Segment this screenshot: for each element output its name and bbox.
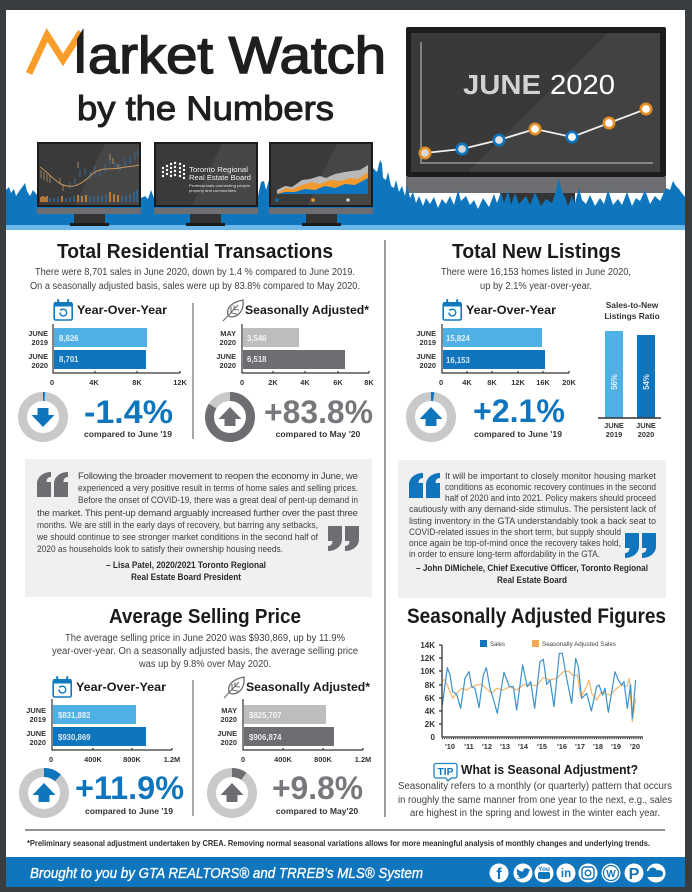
bar chart: seasonally adjusted: MAY [220,329,236,338]
legend: Seasonally Adjusted Sales [542,642,616,648]
bar chart: price seasonally adjusted: 1.2M [355,755,371,764]
quote text: in order to ensure long-term affordability in the GTA. [409,549,600,559]
logo M [29,28,84,74]
bar chart: new listings [416,324,576,387]
title line 2: by the Numbers [77,90,334,128]
bar chart: new listings: 15,824 [446,334,471,343]
panel: total residential transactions [22,241,374,439]
social icons [490,864,666,883]
title [29,27,386,85]
attribution: – John DiMichele, Chief Executive Officer, Toronto Regional [416,562,648,573]
icon: opening quote [409,473,440,498]
year-over-year title: Year-Over-Year [466,303,556,317]
bar chart: sales-to-new listings ratio: 2020 [638,430,654,439]
stat: +83.8%: +83.8% [264,394,373,430]
bar chart: price year-over-year: 0 [49,755,53,764]
icon: leaf [223,300,243,321]
footer credit: Brought to you by GTA REALTORS® and TRREB's MLS® System [30,865,423,882]
intro text: year-over-year. On a seasonally adjusted basis, the average selling price [52,646,358,657]
monitor: Toronto Regional Real Estate Board: Real Estate Board [189,175,251,182]
centre divider [384,240,386,817]
bar chart: seasonally adjusted [216,324,374,387]
icon: closing quote [625,533,656,558]
stat: +11.9%: compared to June '19 [85,806,173,816]
line chart: sales and seasonally adjusted sales: '17 [575,742,585,751]
bar chart: year-over-year: 2020 [32,361,48,370]
bar chart: new listings: 16K [536,378,550,387]
bar chart: seasonally adjusted: 0 [240,378,244,387]
icon: calendar [54,299,72,320]
icon: leaf [224,677,244,698]
intro text [30,267,360,292]
bar chart: seasonally adjusted: 2020 [220,338,236,347]
tip text: Seasonality refers to a monthly (or quarterly) pattern that occurs [398,781,672,792]
line chart: sales and seasonally adjusted sales: 8K [425,681,435,690]
bar chart: new listings: 4K [462,378,472,387]
legend: Sales [490,642,505,648]
line chart: sales and seasonally adjusted sales: 10K [420,667,435,676]
quote text: COVID-related issues in the short term, but supply should [409,527,621,537]
year-over-year title: Year-Over-Year [77,303,167,317]
line chart: sales and seasonally adjusted sales: 2K [425,720,435,729]
bar chart: price seasonally adjusted: 400K [274,755,292,764]
bar chart: sales-to-new listings ratio: Sales-to-New [606,300,659,310]
footer banner [6,857,685,887]
bar chart: new listings: 2020 [420,361,436,370]
monitor: Toronto Regional Real Estate Board: property and communities. [189,189,237,193]
attribution [106,559,266,582]
title line 1: arket Watch [88,27,386,85]
line chart: sales and seasonally adjusted sales: 12K [420,654,435,663]
bar chart: seasonally adjusted: 2K [268,378,278,387]
tip text [398,781,672,819]
stat: +9.8%: +9.8% [272,770,363,806]
stat: +83.8%: compared to May '20 [276,429,361,439]
bar chart: sales-to-new listings ratio: 56% [610,374,619,390]
line chart: sales and seasonally adjusted sales: '15 [537,742,547,751]
heading: Average Selling Price [109,606,301,628]
intro text [441,267,631,292]
quote text [409,471,656,559]
line chart: sales and seasonally adjusted sales: '16 [557,742,567,751]
quote text: half of 2020 and into 2021. Policy makers should proceed [445,493,656,503]
bar chart: seasonally adjusted: 6K [333,378,343,387]
donut: plus 11.9 percent [24,772,64,814]
bar chart: year-over-year: 8,826 [59,334,79,343]
bar chart: price seasonally adjusted: 800K [314,755,332,764]
monitor: Toronto Regional Real Estate Board: Professionals connecting people, [189,184,251,188]
bar chart: seasonally adjusted: 2020 [220,361,236,370]
bar chart: seasonally adjusted: JUNE [216,352,236,361]
stat: +11.9%: +11.9% [75,770,184,806]
bar chart: seasonally adjusted: 4K [300,378,310,387]
stat: +2.1%: +2.1% [473,393,565,429]
quote text: It will be important to closely monitor housing market [445,471,656,481]
line chart: sales and seasonally adjusted sales: '12 [482,742,492,751]
bar chart: sales-to-new listings ratio: Listings Ratio [604,311,660,321]
bar chart: year-over-year [28,324,187,387]
tip text: are highest in the spring and lowest in the winter each year. [410,808,660,819]
line chart: sales and seasonally adjusted sales: '10 [445,742,455,751]
intro text: There were 16,153 homes listed in June 2020, [441,267,631,278]
intro text: On a seasonally adjusted basis, sales were up by 83.8% compared to May 2020. [30,281,360,292]
quote text: 2020 as households look to satisfy their ownership housing needs. [37,544,283,555]
bar chart: year-over-year: 0 [50,378,54,387]
bar chart: price seasonally adjusted: $825,707 [249,711,282,720]
bar chart: price seasonally adjusted: $906,874 [249,733,282,742]
stat: +9.8%: compared to May'20 [276,806,358,816]
social icons: in [561,868,571,880]
quote text: we should continue to see stronger market conditions in the second half of [36,532,318,543]
icon: tip badge: TIP [438,767,454,778]
heading: Seasonally Adjusted Figures [407,605,666,628]
panel: total new listings [410,241,661,439]
bar chart: new listings: 20K [562,378,576,387]
line chart: sales and seasonally adjusted sales: '20 [630,742,640,751]
dotted logo [163,163,184,178]
monitor: area chart [269,142,373,226]
monitor: Toronto Regional Real Estate Board: Toronto Regional [189,167,248,174]
quote text [36,471,358,555]
year-over-year title: Year-Over-Year [76,680,166,694]
bar chart: sales-to-new listings ratio [598,300,661,439]
icon: calendar [443,299,461,320]
seasonally adjusted title: Seasonally Adjusted* [245,303,369,317]
bar chart: sales-to-new listings ratio: JUNE [604,421,624,430]
bar chart: year-over-year: 2019 [32,338,48,347]
social icons: W [606,869,616,880]
line chart: sales and seasonally adjusted sales [420,640,643,751]
monitor: stock chart [37,142,141,226]
line chart: sales and seasonally adjusted sales: 0 [431,733,436,742]
bar chart: year-over-year: 8K [132,378,142,387]
bar chart: price year-over-year: 2019 [30,715,46,724]
bar chart: price seasonally adjusted [217,699,371,764]
bar chart: price year-over-year: 400K [84,755,102,764]
heading: Total Residential Transactions [57,241,333,263]
legend [480,640,616,648]
bar chart: price seasonally adjusted: 2020 [221,715,237,724]
social icons: P [629,866,640,883]
bar chart: new listings: 8K [487,378,497,387]
bar chart: price year-over-year: $831,882 [58,711,91,720]
line chart: sales and seasonally adjusted sales: 4K [425,707,435,716]
bar chart: price year-over-year: JUNE [26,729,46,738]
line chart: sales and seasonally adjusted sales: '18 [593,742,603,751]
bar chart: new listings: 2019 [420,338,436,347]
footnote: *Preliminary seasonal adjustment undertaken by CREA. Removing normal seasonal variations allows for more meaningful analysis of monthly changes and underlying trends. [27,839,650,848]
panel: average selling price [24,606,371,816]
attribution: Real Estate Board President [131,571,241,582]
attribution: – Lisa Patel, 2020/2021 Toronto Regional [106,559,266,570]
intro text [52,633,358,670]
bar chart: price year-over-year: 1.2M [164,755,180,764]
intro text: was up by 9.8% over May 2020. [138,659,271,670]
line chart: sales and seasonally adjusted sales: '11 [464,742,474,751]
bar chart: seasonally adjusted: 3,546 [247,334,267,343]
line chart [420,104,651,158]
bar chart: price year-over-year [26,699,180,764]
intro text: There were 8,701 sales in June 2020, down by 1.4 % compared to June 2019. [35,267,355,278]
line chart: sales and seasonally adjusted sales: 6K [425,694,435,703]
bar chart: sales-to-new listings ratio: JUNE [636,421,656,430]
tip text: in roughly the same manner from one year to the next, e.g., sales [398,795,672,806]
line chart: sales and seasonally adjusted sales: 14K [420,641,435,650]
donut: plus 2.1 percent [410,396,452,438]
tip heading: What is Seasonal Adjustment? [461,763,638,777]
attribution: Real Estate Board [497,574,567,585]
bar chart: price year-over-year: JUNE [26,706,46,715]
bar chart: price year-over-year: 2020 [30,738,46,747]
monitor: Toronto Regional Real Estate Board [154,142,258,226]
social icons: You [538,866,550,873]
header skyline band [6,160,685,230]
stat: -1.4%: compared to June '19 [84,429,172,439]
monitor: June 2020 [406,27,666,208]
icon: tip badge [434,764,457,781]
bar chart: price seasonally adjusted: 2020 [221,738,237,747]
bar chart: price seasonally adjusted: 0 [241,755,245,764]
line chart: sales and seasonally adjusted sales: '13 [500,742,510,751]
icon: calendar [53,676,71,697]
callout: John DiMichele quote [398,460,666,598]
bar chart: seasonally adjusted: 6,518 [247,355,267,364]
quote text: conditions as economic recovery continues in the second [445,482,656,492]
seasonally adjusted title: Seasonally Adjusted* [246,680,370,694]
bar chart: year-over-year: 4K [89,378,99,387]
icon: opening quote [37,472,68,497]
quote text: experienced a very positive result in terms of home sales and selling prices. [78,483,358,494]
quote text: the market. This pent-up demand arguably increased further over the past three [37,508,358,519]
bar chart: price year-over-year: 800K [123,755,141,764]
bar chart: new listings: 16,153 [446,356,471,365]
intro text: up by 2.1% year-over-year. [480,281,592,292]
bar chart: price year-over-year: $930,869 [58,733,91,742]
quote text: listing inventory in the GTA understandably took a back seat to [409,516,656,526]
bar chart: year-over-year: 12K [173,378,187,387]
line chart: sales and seasonally adjusted sales: '19 [611,742,621,751]
donut: plus 9.8 percent [212,772,252,814]
quote text: Following the broader movement to reopen the economy in June, we [78,471,358,482]
bar chart: new listings: JUNE [416,352,436,361]
bar chart: seasonally adjusted: 8K [364,378,374,387]
donut: plus 83.8 percent [210,396,250,438]
bar chart: new listings: 12K [511,378,525,387]
quote text: cautiously with any demand-side stimulus. The persistent lack of [409,504,656,514]
quote text: months. We are still in the early days of recovery, but barring any setbacks, [37,520,318,531]
bar chart: year-over-year: JUNE [28,352,48,361]
attribution [416,562,648,585]
quote text: Before the onset of COVID-19, there was a great deal of pent-up demand in [78,495,358,506]
quote text: once again be top-of-mind once the recovery takes hold, [409,538,621,548]
stat: -1.4%: -1.4% [84,394,173,430]
bar chart: year-over-year: JUNE [28,329,48,338]
bar chart: price seasonally adjusted: MAY [221,706,237,715]
intro text: The average selling price in June 2020 was $930,869, up by 11.9% [65,633,345,644]
heading: Total New Listings [452,241,621,263]
panel: seasonally adjusted figures [398,605,672,819]
bar chart: sales-to-new listings ratio: 2019 [606,430,622,439]
social icons: f [496,866,502,883]
callout: Lisa Patel quote [25,459,372,597]
bar chart: year-over-year: 8,701 [59,355,79,364]
stat: +2.1%: compared to June '19 [474,429,562,439]
bar chart: price seasonally adjusted: JUNE [217,729,237,738]
bar chart: new listings: 0 [439,378,443,387]
heading JUNE 2020: JUNE [463,69,541,100]
heading JUNE 2020: 2020 [550,69,615,100]
line chart: sales and seasonally adjusted sales: '14 [518,742,529,751]
donut: minus 1.4 percent [22,396,64,438]
icon: closing quote [328,526,359,551]
bar chart: sales-to-new listings ratio: 54% [642,374,651,390]
bar chart: new listings: JUNE [416,329,436,338]
